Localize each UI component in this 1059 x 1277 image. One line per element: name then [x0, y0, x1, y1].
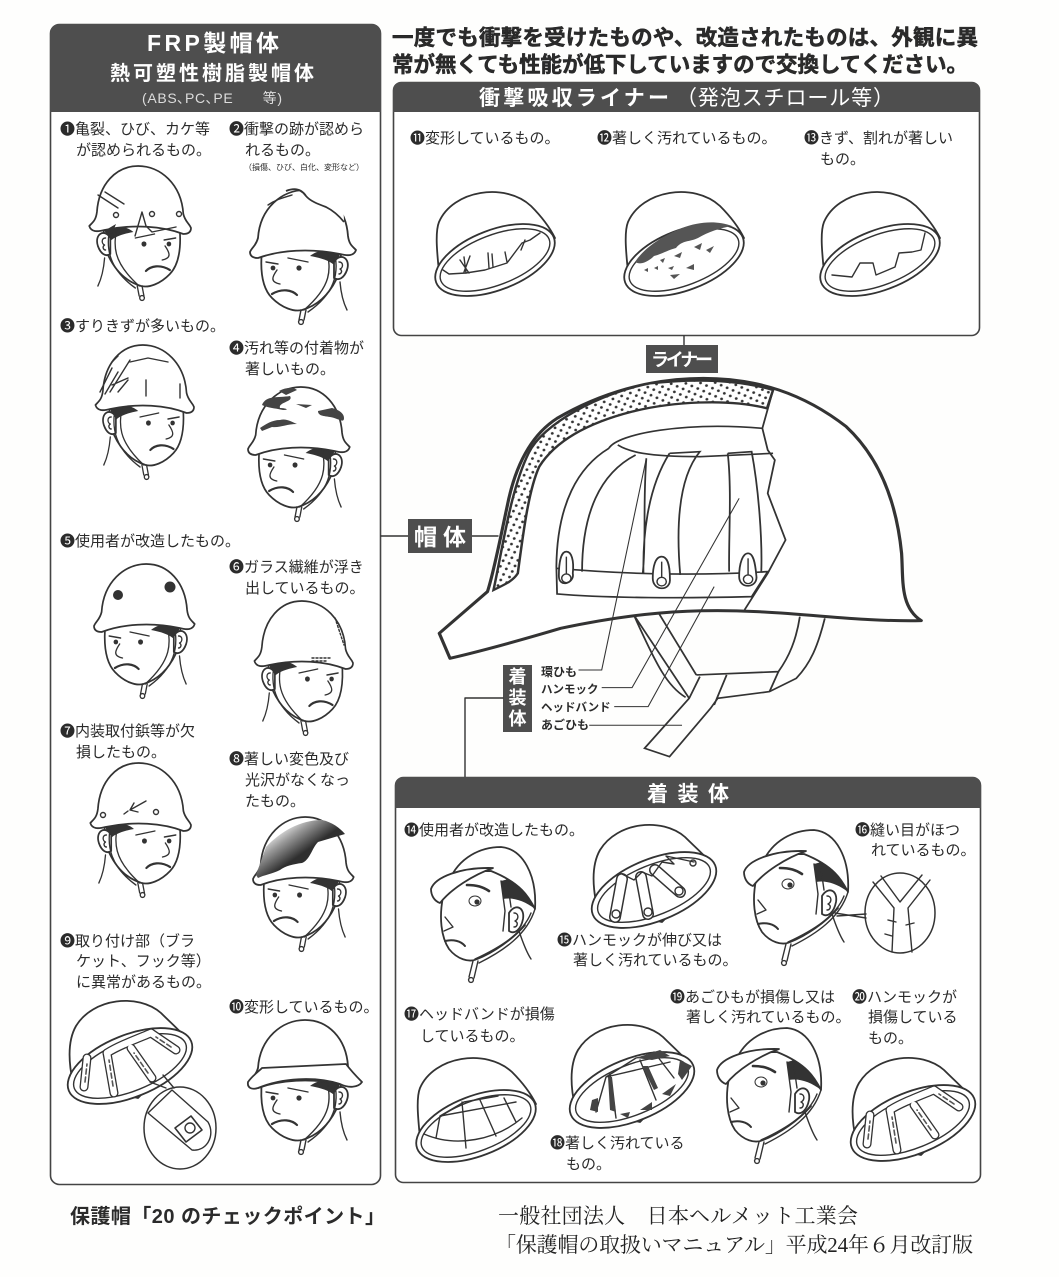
item 18: もの。 — [566, 1156, 611, 1173]
item 8: discoloration — [229, 751, 354, 951]
item 16 — [744, 822, 976, 965]
item 8: discoloration: たもの。 — [245, 793, 305, 810]
item 7: missing fitting — [60, 722, 195, 897]
item 19 — [670, 989, 851, 1163]
item 14 — [404, 822, 584, 982]
item 17: しているもの。 — [420, 1028, 525, 1045]
part names list: ヘッドバンド — [541, 701, 611, 714]
item 18: ⓲著しく汚れている — [550, 1135, 685, 1152]
item 9: bracket abnormality — [57, 932, 216, 1169]
label: liner — [646, 345, 718, 373]
item 1: cracks: ❶亀裂、ひび、カケ等 — [60, 120, 210, 138]
panel header: liner: 衝撃吸収ライナー — [479, 87, 669, 110]
footer: source: 「保護帽の取扱いマニュアル」平成24年６月改訂版 — [495, 1233, 973, 1257]
item 7: missing fitting: ❼内装取付鋲等が欠 — [60, 722, 195, 740]
part names list: 環ひも — [541, 665, 577, 679]
part names list: ハンモック — [541, 683, 598, 696]
item 20: 損傷している — [868, 1009, 958, 1026]
item 8: discoloration: ❽著しい変色及び — [229, 751, 349, 768]
heading: replacement warning: 一度でも衝撃を受けたものや、改造されたものは、外観に異 — [392, 26, 978, 50]
leader lines — [578, 458, 739, 725]
item 13: scratched liner — [804, 130, 953, 311]
item 15: 著しく汚れているもの。 — [573, 952, 738, 969]
item 6: glass fibre — [229, 559, 365, 735]
item 9: bracket abnormality: に異常があるもの。 — [76, 974, 211, 991]
item 17 — [404, 1006, 555, 1177]
item 13: scratched liner: ⓭きず、割れが著しい — [804, 130, 953, 147]
footer: source — [495, 1204, 973, 1257]
connector: shell label line — [381, 535, 498, 537]
heading: replacement warning — [392, 26, 978, 77]
panel: FRP and thermoplastic helmet shell checks — [50, 24, 381, 1184]
connector: fittings label line — [465, 698, 503, 777]
item 4: dirt: ❹汚れ等の付着物が — [229, 339, 364, 357]
panel header: liner — [393, 82, 980, 112]
item 5: user modification: ❺使用者が改造したもの。 — [60, 533, 240, 550]
item 19: ⓳あごひもが損傷し又は — [670, 989, 835, 1006]
label: fittings, vertical: 着 — [508, 667, 526, 687]
label: liner: ライナー — [651, 350, 713, 370]
item 16: れているもの。 — [871, 842, 976, 859]
item 4: dirt: 著しいもの。 — [245, 361, 335, 378]
item 4: dirt — [229, 339, 364, 521]
part names list: あごひも — [541, 717, 589, 732]
item 9: bracket abnormality: ❾取り付け部（ブラ — [60, 932, 195, 950]
footer: check point title: 保護帽「20 のチェックポイント」 — [70, 1205, 385, 1228]
item 6: glass fibre: 出しているもの。 — [245, 580, 365, 597]
keyhole fittings — [559, 552, 757, 588]
panel header: shell materials — [50, 24, 381, 112]
item 20: ⓴ハンモックが — [852, 989, 957, 1006]
label: shell: 帽体 — [414, 524, 466, 550]
item 5: user modification — [60, 533, 240, 698]
shell outline — [439, 378, 921, 658]
item 15 — [557, 825, 738, 969]
item 8: discoloration: 光沢がなくなっ — [245, 772, 350, 789]
label: shell — [408, 519, 472, 553]
item 6: glass fibre: ❻ガラス繊維が浮き — [229, 559, 364, 576]
item 19: 著しく汚れているもの。 — [686, 1009, 851, 1026]
item 7: missing fitting: 損したもの。 — [76, 744, 166, 761]
item 12: dirty liner: ⓬著しく汚れているもの。 — [597, 130, 777, 147]
label: fittings, vertical — [503, 665, 532, 732]
item 9: bracket abnormality: ケット、フック等） — [76, 952, 211, 970]
item 1: cracks — [60, 120, 211, 300]
part names list — [541, 665, 611, 732]
item 2: impact marks: ❷衝撃の跡が認めら — [229, 121, 364, 138]
straps — [634, 613, 825, 757]
item 13: scratched liner: もの。 — [820, 151, 865, 168]
item 16: ⓰縫い目がほつ — [855, 822, 960, 839]
panel: fittings checks — [395, 777, 986, 1182]
liner layer dotted — [494, 381, 773, 590]
panel: shock-absorbing liner checks — [393, 82, 980, 336]
item 20: もの。 — [868, 1030, 913, 1047]
panel header: shell materials: (ABS､PC､PE 等) — [142, 90, 282, 106]
item 3: many scratches: ❸すりきずが多いもの。 — [60, 317, 225, 335]
item 11: deformed liner: ⓫変形しているもの。 — [410, 130, 560, 147]
item 10: deformation — [229, 999, 379, 1154]
panel header: fittings — [395, 777, 981, 808]
item 10: deformation: ❿変形しているもの。 — [229, 999, 379, 1016]
heading: replacement warning: 常が無くても性能が低下していますので交換してください。 — [392, 52, 968, 77]
item 20 — [840, 989, 986, 1176]
diagram: helmet cross-section — [439, 378, 921, 757]
panel header: shell materials: 熱可塑性樹脂製帽体 — [110, 62, 314, 85]
item 2: impact marks — [229, 121, 364, 324]
item 12: dirty liner — [597, 130, 777, 311]
panel header: liner: （発泡スチロール等） — [676, 87, 894, 110]
item 18 — [550, 1025, 705, 1173]
hammock and headband — [745, 390, 786, 610]
item 3: many scratches — [60, 317, 225, 479]
footer: source: 一般社団法人 日本ヘルメット工業会 — [498, 1204, 858, 1228]
item 11: deformed liner — [410, 130, 565, 311]
item 15: ⓯ハンモックが伸び又は — [557, 932, 722, 949]
panel header: shell materials: FRP製帽体 — [147, 30, 279, 56]
item 1: cracks: が認められるもの。 — [76, 142, 211, 159]
connector: liner label line — [683, 336, 685, 345]
panel header: fittings: 着装体 — [647, 783, 729, 806]
label: fittings, vertical: 体 — [508, 709, 526, 729]
label: fittings, vertical: 装 — [508, 688, 526, 708]
item 14: ⓮使用者が改造したもの。 — [404, 822, 584, 839]
item 17: ⓱ヘッドバンドが損傷 — [404, 1006, 555, 1023]
item 2: impact marks: （損傷、ひび、白化、変形など） — [244, 162, 364, 172]
item 2: impact marks: れるもの。 — [245, 142, 320, 159]
